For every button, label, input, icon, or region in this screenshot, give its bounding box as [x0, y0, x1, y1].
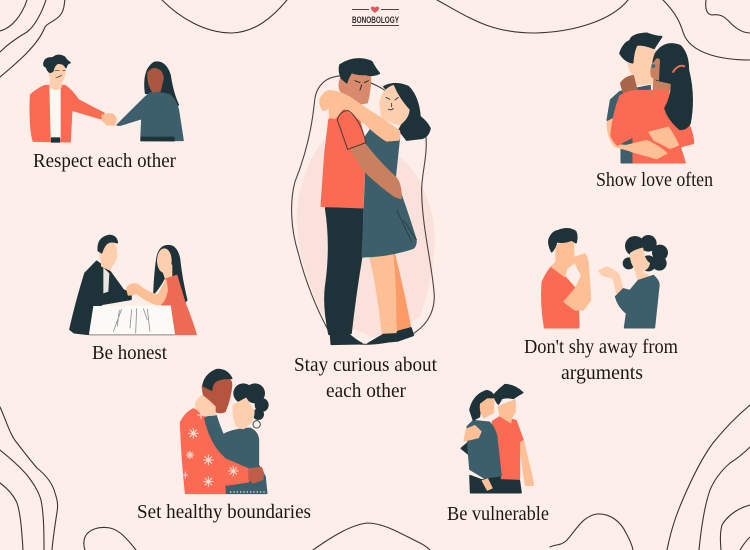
caption: set healthy boundaries: Set healthy boundaries	[137, 501, 311, 523]
man	[607, 33, 667, 163]
woman	[461, 391, 501, 493]
illustration: stay curious about each other, central couple	[292, 59, 435, 344]
illustration: don't shy away from arguments, talking couple	[542, 229, 668, 328]
caption: stay curious about each other: Stay curious about	[294, 354, 437, 376]
illustration: be honest, couple at a table	[70, 236, 196, 336]
man's shirt	[321, 109, 365, 208]
snowflake pattern	[183, 411, 239, 487]
icon: heart	[371, 6, 379, 13]
dress	[362, 121, 416, 257]
caption: don't shy away from arguments: arguments	[561, 362, 643, 384]
man's trousers	[325, 208, 363, 334]
illustration: be vulnerable, couple side by side	[461, 385, 533, 493]
man in suit	[70, 236, 131, 334]
logo: Bonobology	[352, 6, 399, 26]
illustration: respect each other, handshake	[30, 55, 183, 143]
man	[30, 55, 104, 143]
man's head	[202, 370, 232, 413]
table	[89, 305, 175, 336]
caption: don't shy away from arguments: Don't shy away from	[524, 336, 678, 358]
woman's head	[233, 383, 269, 428]
caption: respect each other: Respect each other	[33, 150, 176, 172]
man	[492, 385, 533, 493]
caption: stay curious about each other: each other	[326, 380, 406, 402]
man's head	[339, 72, 371, 104]
man's arm	[351, 144, 401, 199]
logo: Bonobology: BONOBOLOGY	[352, 15, 399, 26]
man	[542, 229, 591, 328]
woman	[117, 62, 183, 141]
woman	[611, 44, 693, 163]
woman	[599, 235, 668, 328]
woman's arm	[320, 91, 400, 141]
caption: be vulnerable: Be vulnerable	[447, 503, 549, 525]
outline blob	[292, 76, 434, 344]
illustration: set healthy boundaries, embracing couple	[181, 370, 269, 493]
woman's legs	[392, 253, 412, 331]
caption: be honest: Be honest	[92, 342, 167, 364]
woman	[127, 246, 196, 334]
caption: show love often: Show love often	[596, 169, 713, 191]
caption: don't shy away from arguments	[524, 336, 678, 384]
illustration: show love often, kissing couple	[607, 33, 693, 163]
background blob	[297, 140, 435, 340]
woman's hair and face	[384, 84, 430, 140]
caption: stay curious about each other	[294, 354, 437, 402]
